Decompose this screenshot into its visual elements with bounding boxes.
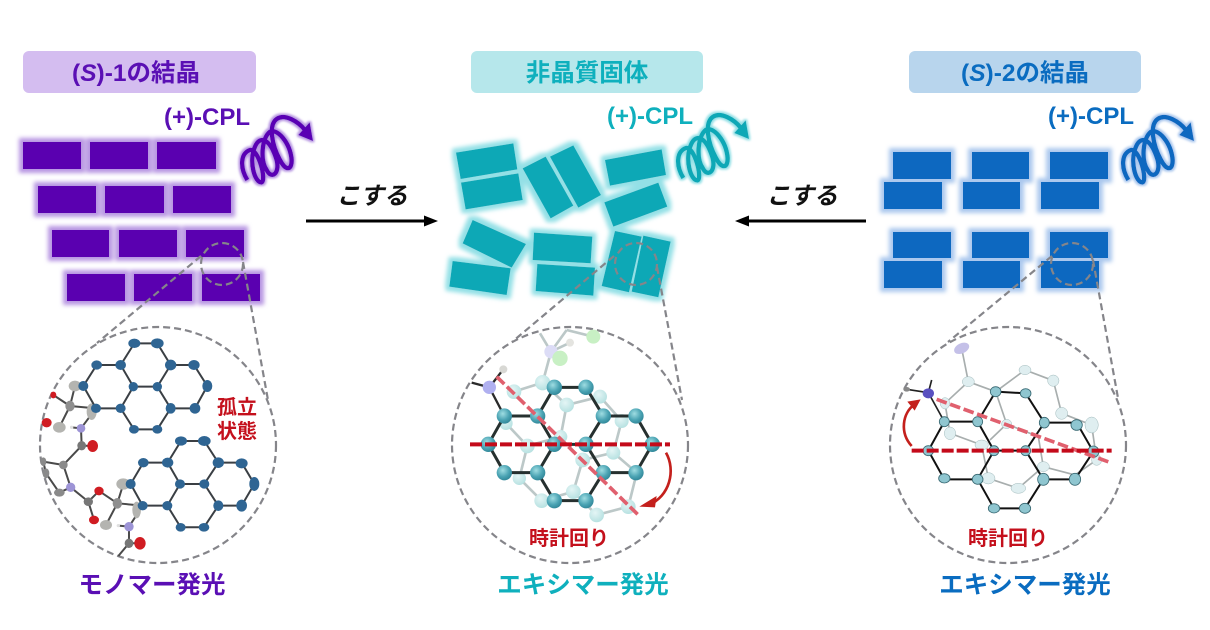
molecule: teal excimer pair	[470, 330, 671, 522]
annotation: clockwise: 時計回り	[529, 527, 609, 550]
heading: amorphous solid: 非晶質固体	[526, 59, 649, 87]
heading: amorphous solid	[471, 51, 703, 93]
panel: (S)-1 crystal	[23, 51, 313, 599]
caption: excimer emission teal: エキシマー発光	[497, 571, 669, 599]
icon: blue CPL helix	[1123, 117, 1194, 182]
panel: (S)-2 crystal	[884, 51, 1194, 599]
annotation: isolated state: 孤立	[217, 396, 257, 419]
bricks: stacked pair packing	[884, 152, 1108, 288]
bricks: disordered packing	[449, 143, 671, 297]
molecule: isolated monomers	[40, 338, 259, 556]
caption: excimer emission blue: エキシマー発光	[939, 571, 1111, 599]
annotation: isolated state: 状態	[217, 420, 257, 443]
label: (+)-CPL blue: (+)-CPL	[1048, 103, 1134, 130]
panel: amorphous solid	[449, 51, 749, 599]
icon: purple CPL helix	[242, 117, 313, 182]
icon: teal CPL helix	[678, 115, 749, 180]
heading: (S)-2 crystal	[909, 51, 1141, 93]
annotation: isolated state	[217, 396, 257, 443]
zoom callout lines	[890, 243, 1126, 563]
arrow: left crystal to amorphous: こする	[336, 183, 408, 210]
annotation: clockwise: 時計回り	[968, 527, 1048, 550]
label: (+)-CPL teal: (+)-CPL	[607, 103, 693, 130]
caption: monomer emission: モノマー発光	[78, 571, 226, 599]
arrow: left crystal to amorphous	[306, 183, 438, 226]
heading: (S)-1 crystal: (S)-1の結晶	[72, 59, 200, 87]
heading: (S)-1 crystal	[23, 51, 256, 93]
zoom callout lines	[40, 243, 276, 563]
arrow: right crystal to amorphous: こする	[766, 183, 838, 210]
molecule: blue excimer pair	[903, 340, 1112, 513]
label: (+)-CPL purple: (+)-CPL	[164, 104, 250, 131]
zoom callout lines	[452, 243, 688, 563]
heading: (S)-2 crystal: (S)-2の結晶	[961, 59, 1089, 87]
bricks: ordered crystal packing	[23, 142, 260, 301]
arrow: right crystal to amorphous	[735, 183, 866, 226]
